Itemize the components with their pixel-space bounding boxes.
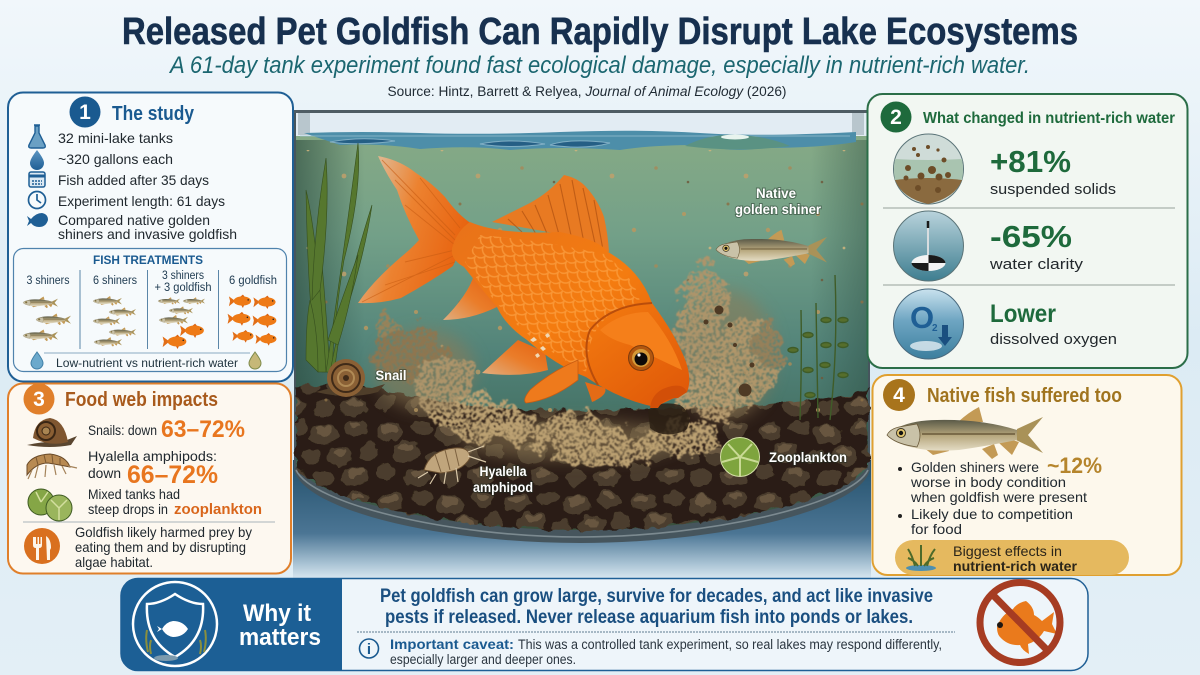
icon: low-nutrient drop [31,352,43,369]
stat: water clarity: -65% [990,219,1072,254]
sediment over gravel [486,418,728,467]
icon: secchi disk [894,211,964,281]
gravel bed [296,384,868,530]
matters: matters [239,624,321,651]
callout: biggest effects [895,540,1129,575]
item: tanks: 32 mini-lake tanks [58,130,173,146]
caveat label: Important caveat: [390,636,514,652]
amphipod text line 2: down [88,465,121,481]
explanation line 1: Goldfish likely harmed prey by [75,524,252,540]
particles in the water [300,150,865,420]
label: water clarity: water clarity [989,256,1084,273]
icon: info [360,639,378,658]
icon: fish [27,213,48,227]
treatment: 6 goldfish [228,275,277,346]
icon: zooplankton [28,489,72,521]
blue label block [121,578,342,671]
snails text: Snails: down [88,422,157,438]
panel 2: what changed [868,94,1188,368]
nutrient label: Low-nutrient vs nutrient-rich water [56,356,238,370]
ventral fin [585,382,605,402]
competition text: Likely due to competition [911,506,1073,522]
treatments heading: FISH TREATMENTS [93,253,203,267]
explanation line 3: algae habitat. [75,554,153,570]
badge 2 [880,102,912,132]
mouth [650,386,687,408]
glass reflections [298,113,864,135]
body [452,222,689,407]
tank rim [294,110,870,113]
water [296,136,868,530]
badge 1 [70,96,100,128]
caveat text: This was a controlled tank experiment, so real lakes may respond differently, [518,637,942,652]
zooplankton highlight: zooplankton [174,501,262,518]
wave glint [721,134,749,140]
heading: The study [112,103,195,125]
badge 3: 3 [33,388,45,411]
zooplankton text: Mixed tanks had [88,486,180,502]
amphipod text: Hyalella amphipods: [88,448,217,464]
tank floor shadow [293,460,871,582]
amphipod [418,446,486,484]
why it: Why it [243,600,311,627]
snails stat: 63–72% [161,416,245,443]
stat: ~12% [1047,453,1102,478]
treatment: mixed: 3 shiners [162,270,204,282]
icon: oxygen: 2 [932,323,938,334]
snail label: Snail [376,367,406,383]
competition line 2: for food [911,521,962,537]
icon: fork and knife [24,528,60,564]
dorsal rays [508,180,603,250]
amphipods stat: 66–72% [127,461,218,489]
treatment: mixed [154,270,212,349]
central tank illustration [293,110,871,582]
right pond plant [788,275,848,420]
icon: snail [27,418,77,447]
tank glass [294,111,870,543]
scales [465,235,640,372]
heading: Food web impacts [65,389,218,411]
treatment: 3 shiners: 3 shiners [26,275,70,287]
head highlight [600,312,682,370]
pelvic fin [482,340,548,375]
badge 2: 2 [890,106,902,129]
fish treatments box [14,248,286,372]
native shiner [716,230,827,267]
label: suspended solids: suspended solids [990,181,1116,198]
tank base highlight [296,470,868,537]
badge 3 [24,384,54,414]
golden shiner [887,407,1043,459]
dark wave stripes [300,136,850,147]
panel 3: food web impacts [8,384,291,574]
sediment clumps [704,306,754,396]
treatment: 6 goldfish: 6 goldfish [229,275,277,287]
icon: shield [133,582,217,666]
gill cover [586,303,652,385]
body condition line 2: worse in body condition [910,474,1066,490]
icon: suspended solids [894,134,964,204]
badge 4 [883,379,915,411]
heading: What changed in nutrient-rich water [923,110,1175,127]
title: Released Pet Goldfish Can Rapidly Disrupt Lake Ecosystems [122,11,1078,53]
source line: Source: Hintz, Barrett & Relyea, Journal of Animal Ecology (2026) [388,84,786,99]
stat: suspended solids: +81% [990,144,1071,179]
icon: calendar [29,172,45,187]
sediment haze [375,290,775,460]
treatment: 6 shiners: 6 shiners [93,275,137,287]
item: gallons: ~320 gallons each [58,151,173,167]
subtitle: A 61-day tank experiment found fast ecological damage, especially in nutrient-rich water. [168,52,1030,79]
caveat text line 2: especially larger and deeper ones. [390,652,576,667]
icon: oxygen: O [910,300,934,335]
anal fin [443,275,497,320]
zooplankton text line 2: steep drops in [88,501,168,517]
left seaweed [306,143,372,372]
belly sparkle [530,333,550,358]
panel 4: native fish [872,375,1182,575]
item: fish added: Fish added after 35 days [58,172,209,188]
dirt at goldfish mouth [648,403,689,435]
icon: info: i [367,641,371,658]
zooplankton label: Zooplankton [769,449,847,465]
eye [628,346,654,370]
treatment: 3 shiners [23,275,71,341]
air gap above water [296,113,868,137]
icon: no goldfish [980,582,1060,662]
panel 1: the study [8,92,293,382]
icon: oxygen [894,289,964,359]
dorsal fin [492,175,609,252]
bullet 2 [898,514,902,518]
treatment: mixed: + 3 goldfish [154,282,212,294]
treatment: 6 shiners [93,275,137,346]
zooplankton [720,438,760,476]
fin rays on tail [362,160,460,302]
body condition line 3: when goldfish were present [910,489,1087,505]
amphipod label: Hyalella [480,463,527,479]
panel: why it matters [121,578,1088,671]
icon: water drop [30,150,44,170]
callout line 1: Biggest effects in [953,543,1062,559]
key message line 2: pests if released. Never release aquarium fish into ponds or lakes. [385,607,913,628]
item: compared: Compared native golden [58,212,210,228]
pectoral fin [525,360,578,403]
badge 1: 1 [79,101,91,124]
caudal fin [358,156,472,303]
badge 4: 4 [893,384,905,407]
amphipod label line 2: amphipod [473,479,533,495]
label: oxygen: dissolved oxygen [990,331,1117,348]
item: compared line 2: shiners and invasive goldfish [58,226,237,242]
sediment plume right [676,266,786,419]
icon: amphipod [27,454,77,479]
sediment plume left [371,317,520,442]
callout line 2: nutrient-rich water [953,558,1078,574]
snail [316,359,385,397]
water side shading [296,140,868,460]
shiner label: Native [756,185,796,201]
icon: nutrient-rich drop [249,352,261,369]
key message line 1: Pet goldfish can grow large, survive for decades, and act like invasive [380,586,933,607]
icon: clock [28,192,46,208]
item: length: Experiment length: 61 days [58,193,225,209]
icon: reeds [906,545,936,571]
body condition text: Golden shiners were [911,459,1039,475]
shiner label line 2: golden shiner [735,201,822,217]
goldfish [358,156,689,408]
heading: Native fish suffered too [927,385,1122,407]
stat: oxygen: Lower [990,300,1056,328]
bullet 1 [898,467,902,471]
green wave highlight [685,135,790,150]
water surface waves [304,131,856,150]
icon: flask [29,125,45,148]
explanation line 2: eating them and by disrupting [75,539,246,555]
